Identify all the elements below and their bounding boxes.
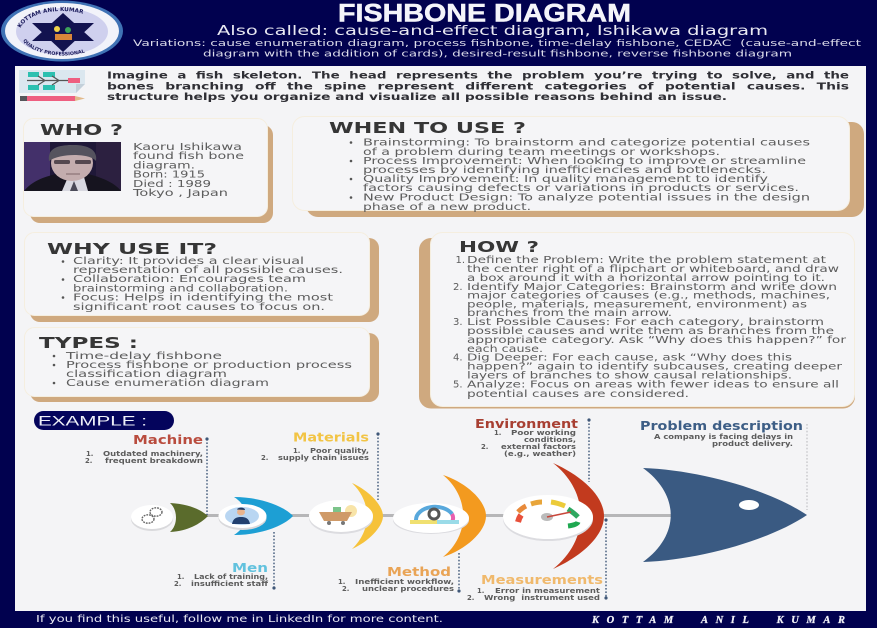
label: machine (85, 433, 203, 465)
why use it list (62, 256, 343, 313)
variations text: diagram with the addition of cards), desired-result fishbone, reverse fishbone diagram (203, 48, 792, 60)
icon: gauge (518, 502, 578, 526)
how numbered steps: people, materials, measurement, environment) as (467, 300, 807, 310)
how numbered steps: 4. (453, 352, 463, 364)
when to use list (350, 138, 810, 213)
fish eye (739, 500, 759, 510)
label: machine: 1. (86, 450, 93, 458)
how numbered steps: appropriate category. Ask “Why does this happen?” for (467, 335, 847, 346)
when to use list: Process Improvement: When looking to improve or streamline (363, 156, 806, 167)
label: problem description: Problem description (640, 419, 803, 433)
bone: method (393, 475, 486, 557)
example pill (34, 411, 174, 430)
variations text: Variations: cause enumeration diagram, process fishbone, time-delay fishbone, CEDAC (cause-and-effect (133, 38, 862, 49)
bone: materials (309, 483, 383, 549)
label: method: unclear procedures (362, 585, 454, 593)
types list: Process fishbone or production process (66, 360, 352, 371)
label: men: insufficient staff (191, 580, 268, 588)
label: problem description: A company is facing delays in (654, 433, 793, 441)
when to use list: factors causing defects or variations in products or services. (363, 183, 799, 194)
who text (132, 142, 244, 199)
intro text: Imagine a fish skeleton. The head represents the problem you’re trying to solve, and the (107, 70, 850, 82)
example pill: EXAMPLE : (38, 412, 147, 428)
title: FISHBONE DIAGRAM (338, 0, 631, 28)
when to use list: processes by identifying inefficiencies and bottlenecks. (363, 165, 766, 176)
label: machine: 2. (85, 457, 92, 465)
label: measurements: Wrong instrument used (484, 594, 600, 602)
heading: why use it: WHY USE IT? (47, 240, 217, 258)
fish head (643, 468, 807, 562)
bone: men (218, 497, 293, 535)
logo badge: KOTTAM ANIL KUMAR (17, 6, 84, 28)
how numbered steps: Dig Deeper: For each cause, ask “Why does this (467, 352, 792, 364)
when to use list: of a problem during team meetings or workshops. (363, 147, 720, 158)
how numbered steps: happen?” again to identify subcauses, creating deeper (467, 362, 843, 372)
label: environment: 1. (494, 429, 501, 437)
label: method: Method (387, 565, 451, 579)
label: men (174, 561, 268, 588)
footer note: If you find this useful, follow me in LinkedIn for more content. (36, 614, 443, 625)
how numbered steps: Identify Major Categories: Brainstorm and write down (467, 282, 837, 293)
panel: who (24, 118, 273, 223)
label: measurements: Error in measurement (495, 587, 601, 595)
how numbered steps (453, 255, 847, 400)
how numbered steps: layers of branches to show causal relationships. (467, 370, 792, 382)
why use it list: Clarity: It provides a clear visual (73, 256, 304, 267)
label: men: Lack of training, (194, 573, 268, 581)
logo badge: QUALITY PROFESSIONAL (24, 39, 85, 56)
label: method: 2. (342, 585, 349, 593)
intro text (107, 70, 850, 103)
how numbered steps: each cause. (467, 344, 543, 355)
why use it list: representation of all possible causes. (73, 265, 343, 276)
why use it list: brainstorming and collaboration. (73, 284, 288, 294)
subtitle: Also called: cause-and-effect diagram, Ishikawa diagram (217, 24, 768, 39)
label: measurements (467, 573, 603, 602)
label: machine: frequent breakdown (105, 457, 203, 465)
label: environment: (e.g., weather) (504, 450, 576, 458)
how numbered steps: potential causes are considered. (467, 389, 689, 400)
label: materials: Materials (293, 430, 369, 444)
when to use list: New Product Design: To analyze potential issues in the design (363, 192, 810, 204)
label: men: Men (232, 561, 268, 575)
icon: cart (319, 505, 357, 525)
how numbered steps: branches from the main arrow. (467, 308, 672, 319)
variations text (133, 38, 862, 60)
who text: Died : 1989 (133, 179, 211, 190)
label: method: 1. (338, 578, 345, 586)
icon: fishbone on paper with pencil (19, 70, 85, 101)
spine (205, 514, 675, 517)
how numbered steps: Define the Problem: Write the problem statement at (467, 255, 826, 266)
why use it list: significant root causes to focus on. (73, 302, 325, 313)
who text: Tokyo , Japan (132, 188, 228, 199)
types list (53, 351, 352, 389)
how numbered steps: 5. (453, 380, 463, 390)
label: machine: Machine (133, 433, 203, 447)
label: environment: 2. (481, 443, 488, 451)
icon: gears (142, 508, 162, 523)
who text: found fish bone (133, 151, 244, 162)
who text: Born: 1915 (133, 170, 205, 180)
label: environment: Environment (475, 417, 578, 431)
label: method (338, 565, 454, 593)
label: materials: 1. (293, 447, 300, 455)
when to use list: Brainstorming: To brainstorm and categorize potential causes (363, 138, 810, 148)
label: method: Inefficient workflow, (355, 578, 454, 586)
when to use list: phase of a new product. (363, 202, 531, 213)
label: men: 1. (177, 573, 184, 581)
types list: Cause enumeration diagram (66, 378, 269, 389)
icon: person (225, 507, 259, 525)
label: materials: supply chain issues (278, 454, 369, 462)
label: measurements: 2. (467, 594, 474, 602)
logo badge (1, 0, 123, 62)
intro text: bones branching off the spine represent different categories of potential causes. This (107, 82, 849, 92)
heading: types: TYPES : (39, 334, 138, 352)
how numbered steps: 3. (453, 317, 463, 328)
bone: machine (131, 503, 208, 532)
how numbered steps: the center right of a flipchart or whiteboard, and draw (467, 264, 839, 275)
label: machine: Outdated machinery, (103, 450, 203, 458)
label: problem description (640, 419, 803, 448)
types list: Time-delay fishbone (64, 351, 222, 362)
how numbered steps: major categories of causes (e.g., methods, machines, (467, 290, 830, 302)
who text: Kaoru Ishikawa (133, 142, 242, 153)
how numbered steps: 1. (456, 255, 465, 266)
intro text: structure helps you organize and visualize all possible reasons behind an issue. (107, 92, 727, 103)
label: environment (475, 417, 578, 458)
when to use list: Quality Improvement: In quality management to identify (363, 174, 768, 185)
who text: diagram. (133, 160, 195, 172)
heading: how: HOW ? (459, 238, 539, 256)
fishbone diagram (131, 418, 807, 600)
dotted connector lines (205, 418, 807, 600)
panel: why use it (24, 232, 379, 322)
label: measurements: Measurements (481, 573, 603, 587)
panel: how (419, 232, 855, 408)
how numbered steps: Analyze: Focus on areas with fewer ideas to ensure all (467, 380, 839, 390)
label: environment: conditions, (524, 436, 576, 444)
how numbered steps: List Possible Causes: For each category, brainstorm (467, 317, 824, 328)
label: materials: 2. (261, 454, 268, 462)
how numbered steps: possible causes and write them as branches from the (467, 326, 834, 337)
how numbered steps: a box around it with a horizontal arrow pointing to it. (467, 273, 825, 284)
bone: measurements (503, 463, 604, 569)
label: men: 2. (174, 580, 181, 588)
label: materials (261, 430, 369, 462)
panel: types (24, 328, 379, 402)
why use it list: Collaboration: Encourages team (73, 274, 306, 285)
label: measurements: 1. (477, 587, 484, 595)
label: environment: external factors (501, 443, 576, 451)
heading: when to use: WHEN TO USE ? (329, 119, 526, 137)
label: problem description: product delivery. (712, 440, 793, 448)
icon: process cycle (410, 507, 459, 524)
label: materials: Poor quality, (310, 447, 369, 455)
types list: classification diagram (66, 369, 227, 380)
footer author name: KOTTAM ANIL KUMAR (591, 615, 845, 626)
why use it list: Focus: Helps in identifying the most (73, 292, 333, 304)
heading: who: WHO ? (40, 121, 123, 139)
panel: when to use (292, 116, 864, 217)
how numbered steps: 2. (453, 282, 463, 293)
portrait of Kaoru Ishikawa (24, 142, 121, 191)
label: environment: Poor working (511, 429, 576, 437)
